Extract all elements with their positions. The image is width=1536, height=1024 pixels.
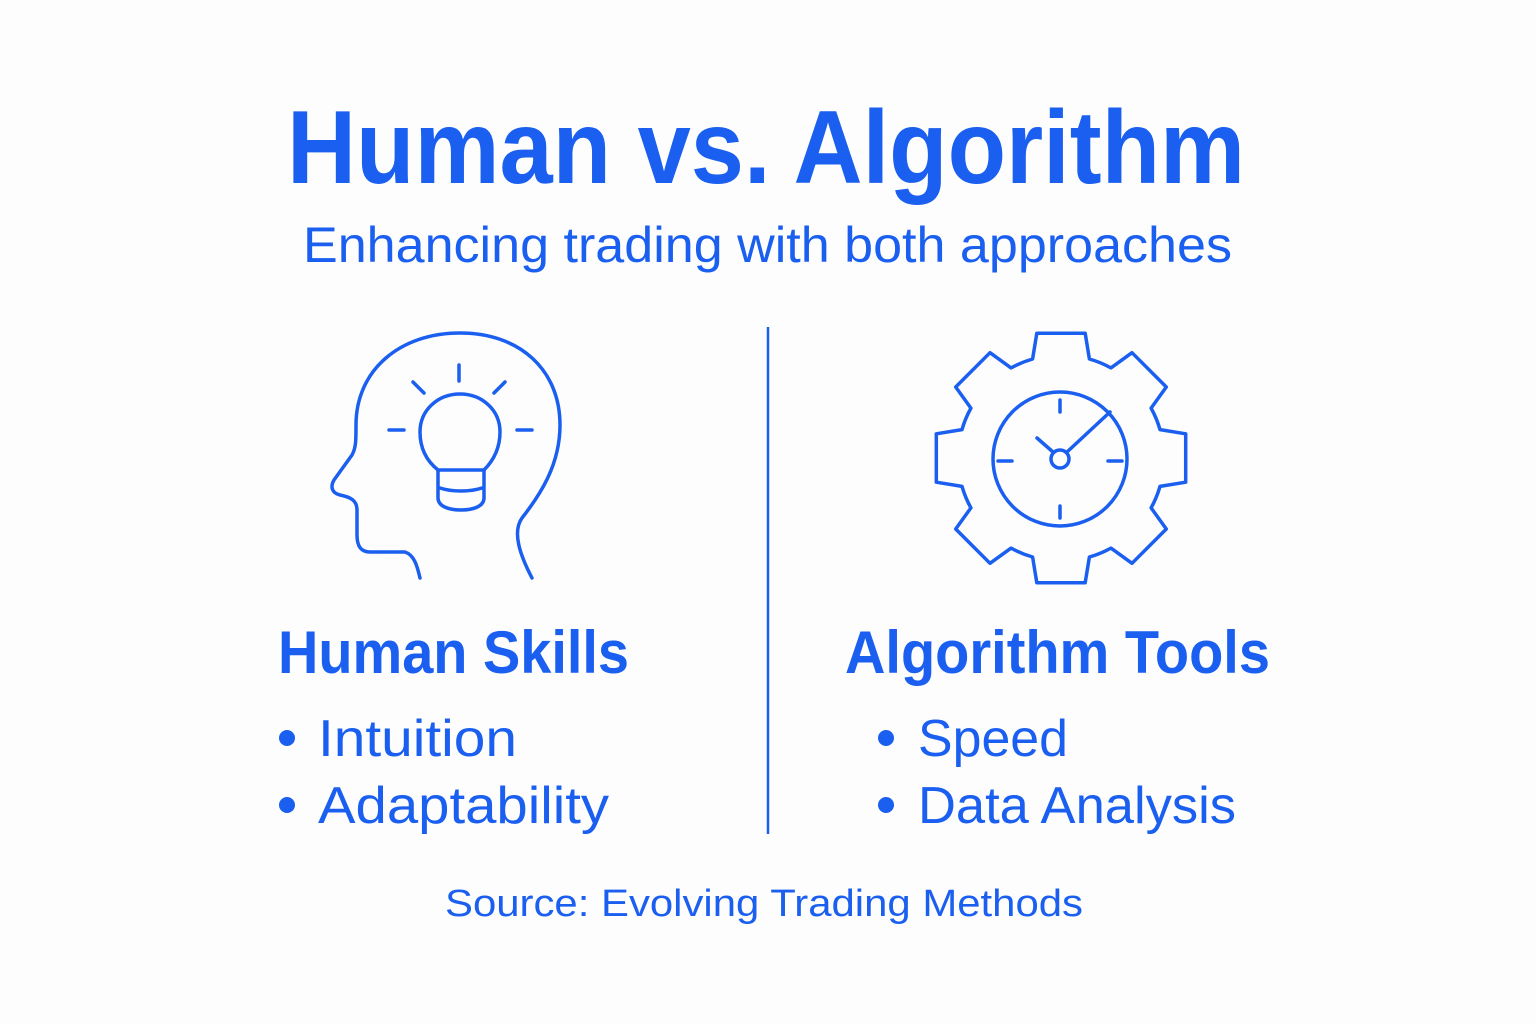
icon: head with lightbulb	[332, 333, 560, 578]
divider	[767, 327, 769, 834]
title: Human vs. Algorithm	[287, 90, 1245, 206]
list: human skills: Adaptability	[318, 777, 609, 835]
source note: Source: Evolving Trading Methods	[445, 883, 1083, 925]
list: human skills: Intuition	[318, 710, 517, 768]
heading: Algorithm Tools: Algorithm Tools	[845, 619, 1270, 686]
list: algorithm tools: Data Analysis	[918, 777, 1236, 835]
icon: gear with clock	[936, 333, 1186, 583]
heading: Human Skills: Human Skills	[278, 619, 629, 686]
list: algorithm tools	[878, 710, 1236, 835]
subtitle: Enhancing trading with both approaches	[303, 217, 1232, 273]
list: algorithm tools: Speed	[918, 710, 1068, 768]
list: human skills	[279, 710, 609, 835]
